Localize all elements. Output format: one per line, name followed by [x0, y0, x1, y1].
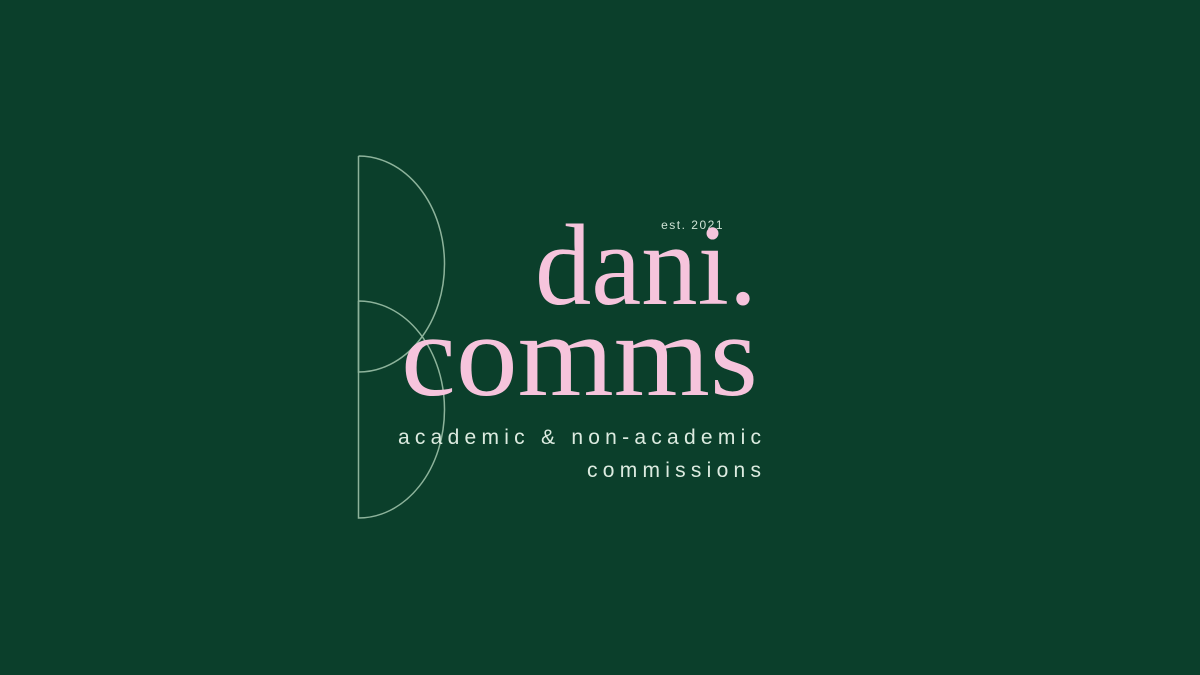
tagline	[398, 426, 761, 482]
est. 2021: est. 2021	[661, 218, 724, 232]
tagline: commissions	[587, 459, 761, 482]
tagline: academic & non-academic	[398, 426, 761, 449]
wordmark: dani.: dani.	[535, 202, 757, 330]
decorative half-circles	[358, 156, 445, 518]
wordmark: comms: comms	[401, 290, 758, 421]
